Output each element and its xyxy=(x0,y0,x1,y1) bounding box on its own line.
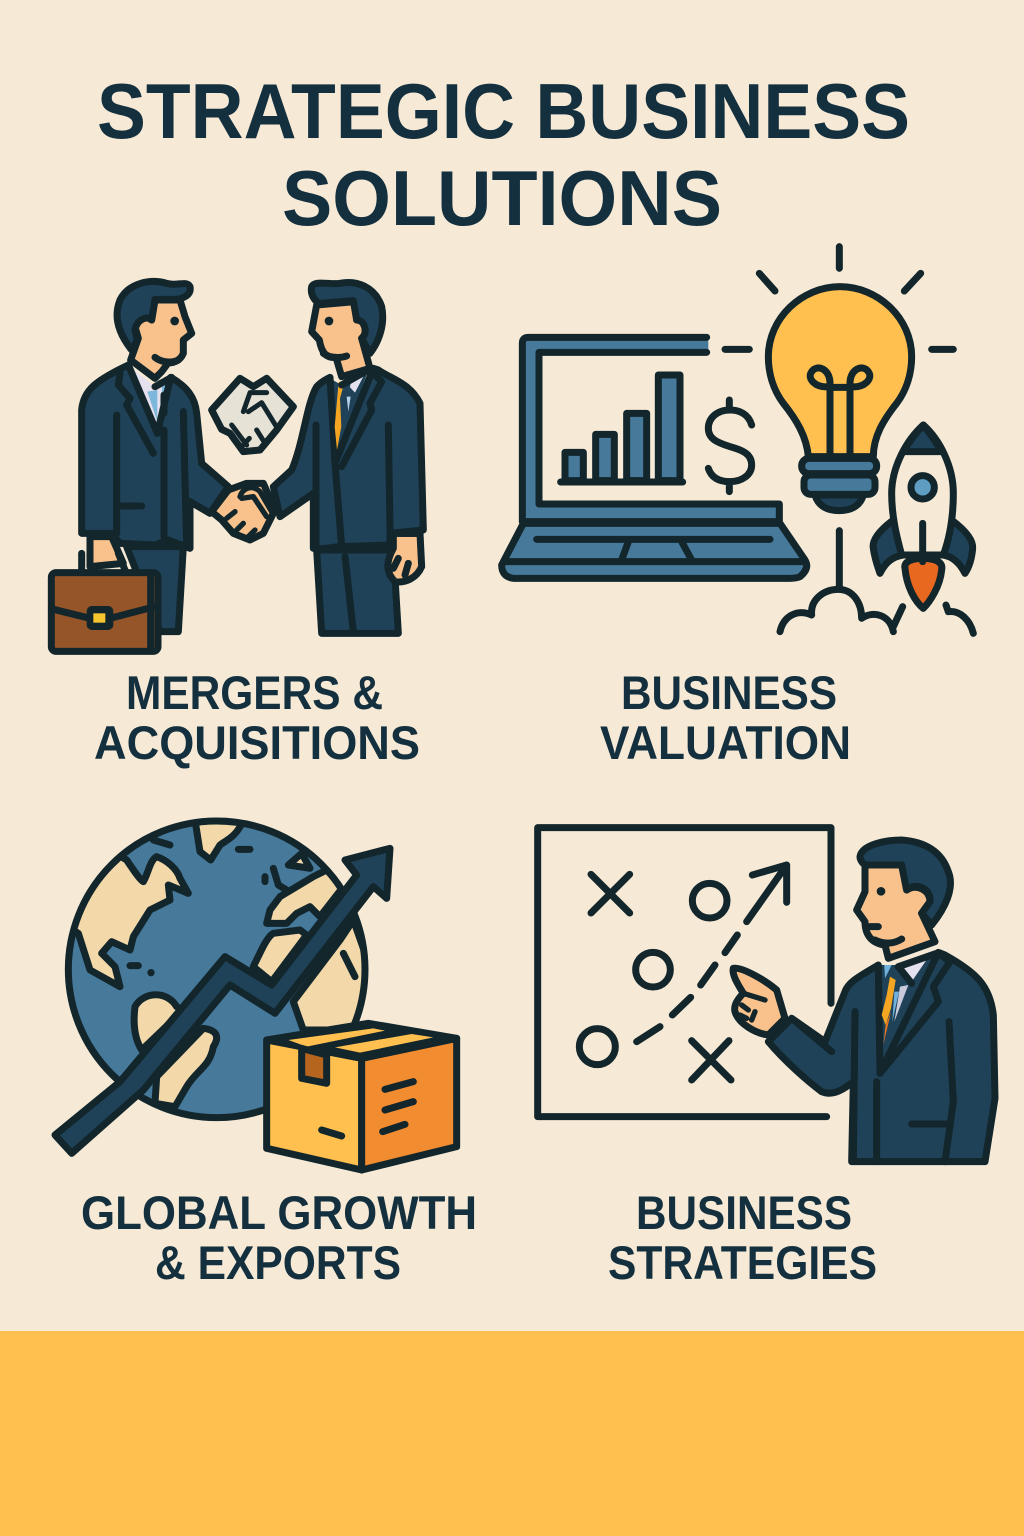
label: business valuation: VALUATION xyxy=(600,716,851,769)
label: business valuation xyxy=(600,666,851,769)
label: mergers and acquisitions xyxy=(94,666,420,769)
panel: business valuation illustration xyxy=(502,247,973,633)
footer band xyxy=(0,1331,1024,1536)
icon: growth arrow xyxy=(55,848,390,1153)
icon: dollar sign xyxy=(708,400,752,492)
icon: left businessman xyxy=(82,281,228,632)
label: mergers and acquisitions: ACQUISITIONS xyxy=(94,716,420,769)
label: business valuation: BUSINESS xyxy=(621,666,837,719)
label: global growth and exports xyxy=(81,1186,477,1289)
label: global growth and exports: & EXPORTS xyxy=(155,1236,401,1289)
label: business strategies xyxy=(608,1186,877,1289)
icon: presenting businessman xyxy=(733,840,995,1162)
icon: light bulb xyxy=(725,247,953,511)
icon: rocket xyxy=(873,425,973,608)
panel: business strategies illustration xyxy=(538,828,995,1162)
label: business strategies: STRATEGIES xyxy=(608,1236,877,1289)
title: SOLUTIONS xyxy=(282,154,722,242)
icon: clasped hands xyxy=(212,483,275,540)
bar chart xyxy=(561,375,683,482)
icon: cardboard box xyxy=(267,1023,457,1170)
label: business strategies: BUSINESS xyxy=(636,1186,852,1239)
label: mergers and acquisitions: MERGERS & xyxy=(126,666,383,719)
icon: launch smoke cloud xyxy=(780,531,973,633)
title xyxy=(97,67,910,242)
icon: small handshake symbol xyxy=(212,378,293,452)
label: global growth and exports: GLOBAL GROWTH xyxy=(81,1186,477,1239)
title: STRATEGIC BUSINESS xyxy=(97,67,910,155)
icon: laptop xyxy=(502,337,807,578)
icon: briefcase xyxy=(51,537,158,651)
panel: mergers and acquisitions illustration xyxy=(51,281,423,651)
panel: global growth illustration xyxy=(40,820,457,1170)
icon: right businessman xyxy=(273,283,423,633)
icon: strategy board xyxy=(538,828,831,1117)
icon: globe xyxy=(40,820,373,1118)
